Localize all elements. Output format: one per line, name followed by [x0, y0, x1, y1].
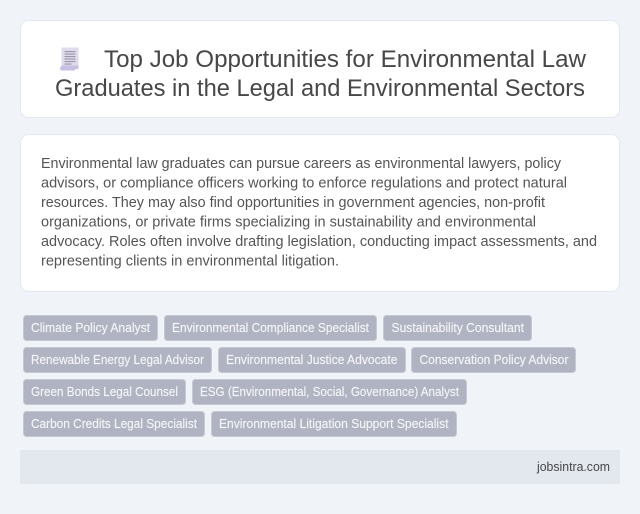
tag: Conservation Policy Advisor [412, 348, 576, 372]
text block: description: resources. They may also find opportunities in government agencies, non-profit [41, 195, 545, 211]
panel: description card [20, 134, 620, 292]
title: Top Job Opportunities for Environmental Law [104, 46, 586, 73]
title [55, 46, 586, 102]
text block: description [41, 156, 597, 270]
tag: Environmental Litigation Support Specialist: Environmental Litigation Support Specialist [219, 416, 449, 431]
icon: document [60, 48, 78, 70]
title: Graduates in the Legal and Environmental Sectors [55, 75, 585, 102]
tag: Sustainability Consultant: Sustainability Consultant [392, 320, 524, 335]
footer [20, 450, 620, 484]
tag: Environmental Justice Advocate: Environmental Justice Advocate [226, 352, 398, 367]
tag: Climate Policy Analyst: Climate Policy Analyst [31, 320, 150, 335]
tag: Green Bonds Legal Counsel [24, 380, 186, 404]
tag: Environmental Litigation Support Specialist [212, 412, 456, 436]
panel: title card [20, 20, 620, 118]
tag: ESG Analyst [192, 380, 466, 404]
tag: Environmental Justice Advocate [218, 348, 406, 372]
text block: description: advisors, or compliance officers working to enforce regulations and protect natural [41, 176, 567, 192]
tag: Climate Policy Analyst [24, 316, 158, 340]
panel: job tags [24, 316, 576, 436]
tag: Carbon Credits Legal Specialist [24, 412, 204, 436]
text block: description: representing clients in environmental litigation. [41, 254, 339, 270]
tag: ESG Analyst: ESG (Environmental, Social, Governance) Analyst [200, 384, 459, 399]
tag: Renewable Energy Legal Advisor: Renewable Energy Legal Advisor [31, 352, 205, 367]
footer: jobsintra.com [536, 459, 610, 474]
tag: Sustainability Consultant [384, 316, 532, 340]
text block: description: Environmental law graduates can pursue careers as environmental lawyers, policy [41, 156, 562, 172]
tag: Environmental Compliance Specialist [164, 316, 376, 340]
tag: Renewable Energy Legal Advisor [24, 348, 212, 372]
tag: Conservation Policy Advisor: Conservation Policy Advisor [420, 352, 569, 367]
tag: Environmental Compliance Specialist: Environmental Compliance Specialist [172, 320, 369, 335]
text block: description: organizations, or private firms specializing in sustainability and environmental [41, 214, 536, 230]
text block: description: advocacy. Roles often involve drafting legislation, conducting impact assessments, and [41, 234, 597, 250]
tag: Carbon Credits Legal Specialist: Carbon Credits Legal Specialist [31, 416, 197, 431]
tag: Green Bonds Legal Counsel: Green Bonds Legal Counsel [31, 384, 178, 399]
